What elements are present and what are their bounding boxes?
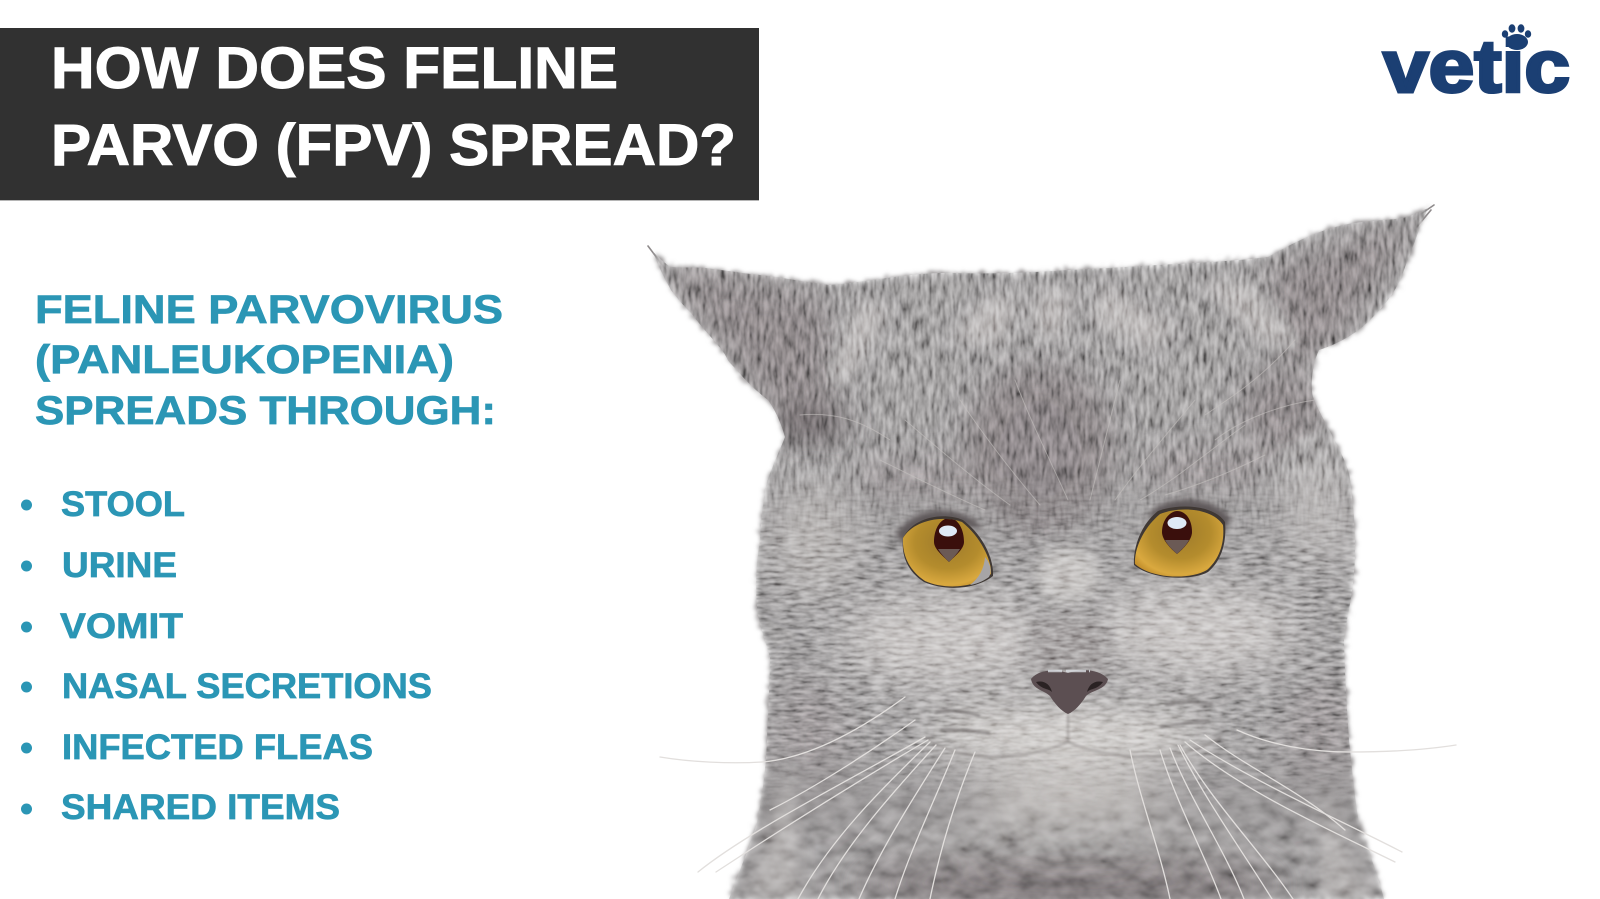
whiskers (660, 697, 1456, 899)
subheading: SPREADS THROUGH: (35, 389, 496, 433)
eye shadows (895, 499, 1232, 545)
bullet list: INFECTED FLEAS (62, 728, 373, 767)
title banner (0, 28, 759, 201)
title text: HOW DOES FELINE (51, 36, 618, 101)
subheading: FELINE PARVOVIRUS (35, 288, 503, 332)
fur texture: forehead (653, 208, 1428, 541)
cat silhouette (653, 208, 1428, 899)
icon: paw (1502, 24, 1531, 50)
forehead hair lines (800, 340, 1315, 510)
logo: vetic: vetic (1383, 25, 1570, 108)
title text: PARVO (FPV) SPREAD? (51, 113, 736, 178)
bullet list (21, 485, 432, 827)
nose (1031, 670, 1108, 714)
bullet list: VOMIT (60, 607, 183, 646)
cat illustration (640, 190, 1456, 899)
title text (51, 36, 736, 178)
eye: right (1134, 506, 1226, 578)
bullet list: STOOL (61, 485, 185, 524)
eye gloss (970, 557, 991, 585)
subheading (35, 288, 503, 433)
bullet list: URINE (62, 546, 177, 585)
fur texture: chest (729, 758, 1384, 899)
fur texture: cheeks (756, 481, 1355, 802)
whisker pad marks (925, 702, 1221, 757)
subheading: (PANLEUKOPENIA) (35, 338, 454, 382)
ear tip wisps (648, 205, 1434, 278)
bullet list: NASAL SECRETIONS (62, 667, 432, 706)
fur shading (640, 190, 1440, 899)
eye: left (902, 516, 994, 588)
bullet list: SHARED ITEMS (61, 788, 340, 827)
